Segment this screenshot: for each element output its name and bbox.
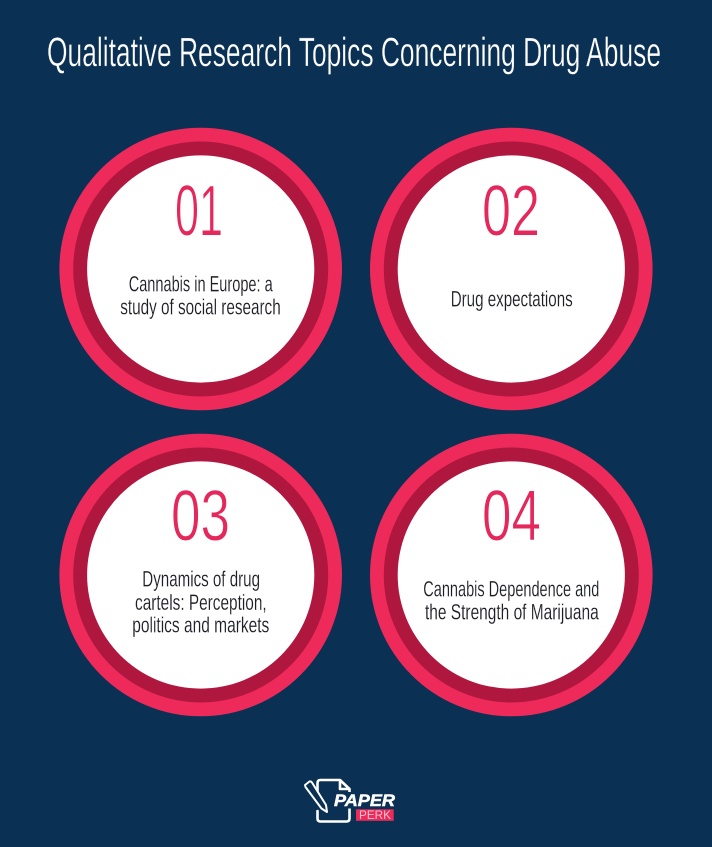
outer ring	[59, 434, 342, 716]
number 01: 01	[175, 172, 223, 252]
inner ring	[73, 448, 328, 702]
topic text: study of social research	[120, 294, 281, 319]
number 04: 04	[482, 476, 541, 556]
logo: Paper Perk	[305, 780, 397, 822]
topic text	[120, 272, 281, 319]
panel: topic 03	[59, 434, 342, 716]
topic text: Cannabis in Europe: a	[129, 272, 273, 297]
topic text: Drug expectations	[451, 287, 573, 312]
topic text: cartels: Perception,	[135, 590, 267, 615]
topic text: politics and markets	[132, 613, 269, 638]
outer ring	[370, 434, 653, 716]
white disc	[87, 155, 314, 383]
topic text: Dynamics of drug	[142, 567, 260, 592]
outer ring	[59, 128, 342, 410]
panel: topic 04	[370, 434, 653, 716]
topic text	[132, 567, 269, 638]
number 02: 02	[482, 172, 540, 252]
outer ring	[370, 128, 653, 410]
inner ring	[384, 448, 639, 702]
icon: pencil	[305, 781, 327, 812]
inner ring	[384, 142, 639, 396]
white disc	[398, 461, 625, 689]
panel: topic 01	[59, 128, 342, 410]
topic text: the Strength of Marijuana	[425, 599, 599, 624]
topic text	[423, 577, 599, 624]
white disc	[398, 155, 625, 383]
wordmark: PAPER: PAPER	[334, 791, 396, 810]
topic text: Cannabis Dependence and	[423, 577, 599, 602]
white disc	[87, 461, 314, 689]
inner ring	[73, 142, 328, 396]
badge: PERK: PERK	[359, 808, 391, 822]
panel: topic 02	[370, 128, 653, 410]
icon: document outline	[318, 780, 350, 822]
number 03: 03	[171, 476, 230, 556]
